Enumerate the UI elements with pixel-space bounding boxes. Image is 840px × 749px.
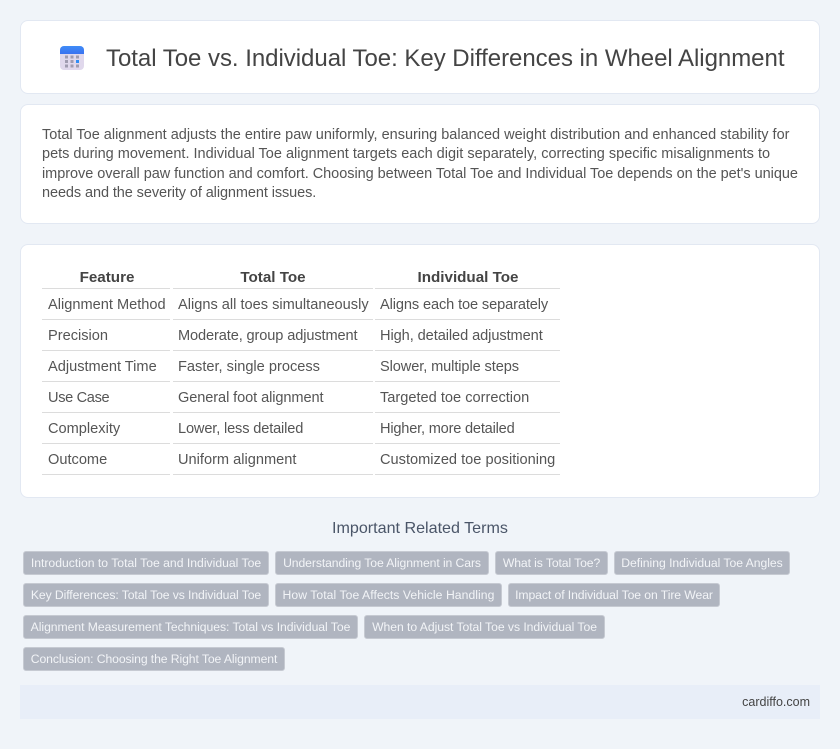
comparison table: Moderate, group adjustment (178, 328, 357, 344)
related term tags (23, 551, 790, 671)
comparison table: General foot alignment (178, 390, 323, 406)
related term tags: Alignment Measurement Techniques: Total vs Individual Toe (31, 620, 350, 634)
text block: introduction: improve overall paw function and comfort. Choosing between Total Toe and Individual Toe depends on the pet's unique (42, 166, 798, 182)
comparison table: Alignment Method (48, 297, 166, 313)
table header: Feature (80, 269, 134, 286)
text block: introduction (42, 127, 798, 201)
panel: title card (20, 20, 820, 94)
text block: introduction: needs and the severity of alignment issues. (42, 185, 316, 201)
related term tags: How Total Toe Affects Vehicle Handling (283, 588, 494, 602)
comparison table: Adjustment Time (48, 359, 157, 375)
related term tags: What is Total Toe? (503, 556, 600, 570)
comparison table: Complexity (48, 421, 120, 437)
comparison table: Customized toe positioning (380, 452, 555, 468)
heading: related terms: Important Related Terms (332, 519, 508, 537)
panel: introduction (20, 104, 820, 224)
footer brand: cardiffo.com (742, 695, 810, 709)
comparison table: Lower, less detailed (178, 421, 303, 437)
comparison table: Aligns all toes simultaneously (178, 297, 369, 313)
comparison table: Higher, more detailed (380, 421, 515, 437)
comparison table: Uniform alignment (178, 452, 296, 468)
comparison table: Aligns each toe separately (380, 297, 548, 313)
related term tags: Key Differences: Total Toe vs Individual Toe (31, 588, 261, 602)
table header: Individual Toe (418, 269, 518, 286)
related term tags: Understanding Toe Alignment in Cars (283, 556, 481, 570)
icon: calendar (60, 46, 84, 70)
comparison table: Targeted toe correction (380, 390, 529, 406)
title: Total Toe vs. Individual Toe: Key Differences in Wheel Alignment (106, 45, 784, 72)
footer (20, 685, 820, 719)
comparison table: Outcome (48, 452, 107, 468)
related term tags: Conclusion: Choosing the Right Toe Alignment (31, 652, 277, 666)
table header: Total Toe (240, 269, 306, 286)
comparison table (42, 269, 560, 475)
related term tags: Introduction to Total Toe and Individual Toe (31, 556, 261, 570)
related term tags: Defining Individual Toe Angles (621, 556, 783, 570)
text block: introduction: pets during movement. Individual Toe alignment targets each digit separately, correcting specific misalignments to (42, 146, 770, 162)
related term tags: When to Adjust Total Toe vs Individual Toe (372, 620, 597, 634)
related term tags: Impact of Individual Toe on Tire Wear (515, 588, 713, 602)
comparison table: Faster, single process (178, 359, 320, 375)
comparison table: Precision (48, 328, 108, 344)
comparison table: Use Case (48, 390, 109, 406)
table header (80, 269, 518, 286)
comparison table: Slower, multiple steps (380, 359, 519, 375)
comparison table: High, detailed adjustment (380, 328, 543, 344)
text block: introduction: Total Toe alignment adjusts the entire paw uniformly, ensuring balanced weight distribution and enhanced stability for (42, 127, 789, 143)
panel: comparison table card (20, 244, 820, 498)
